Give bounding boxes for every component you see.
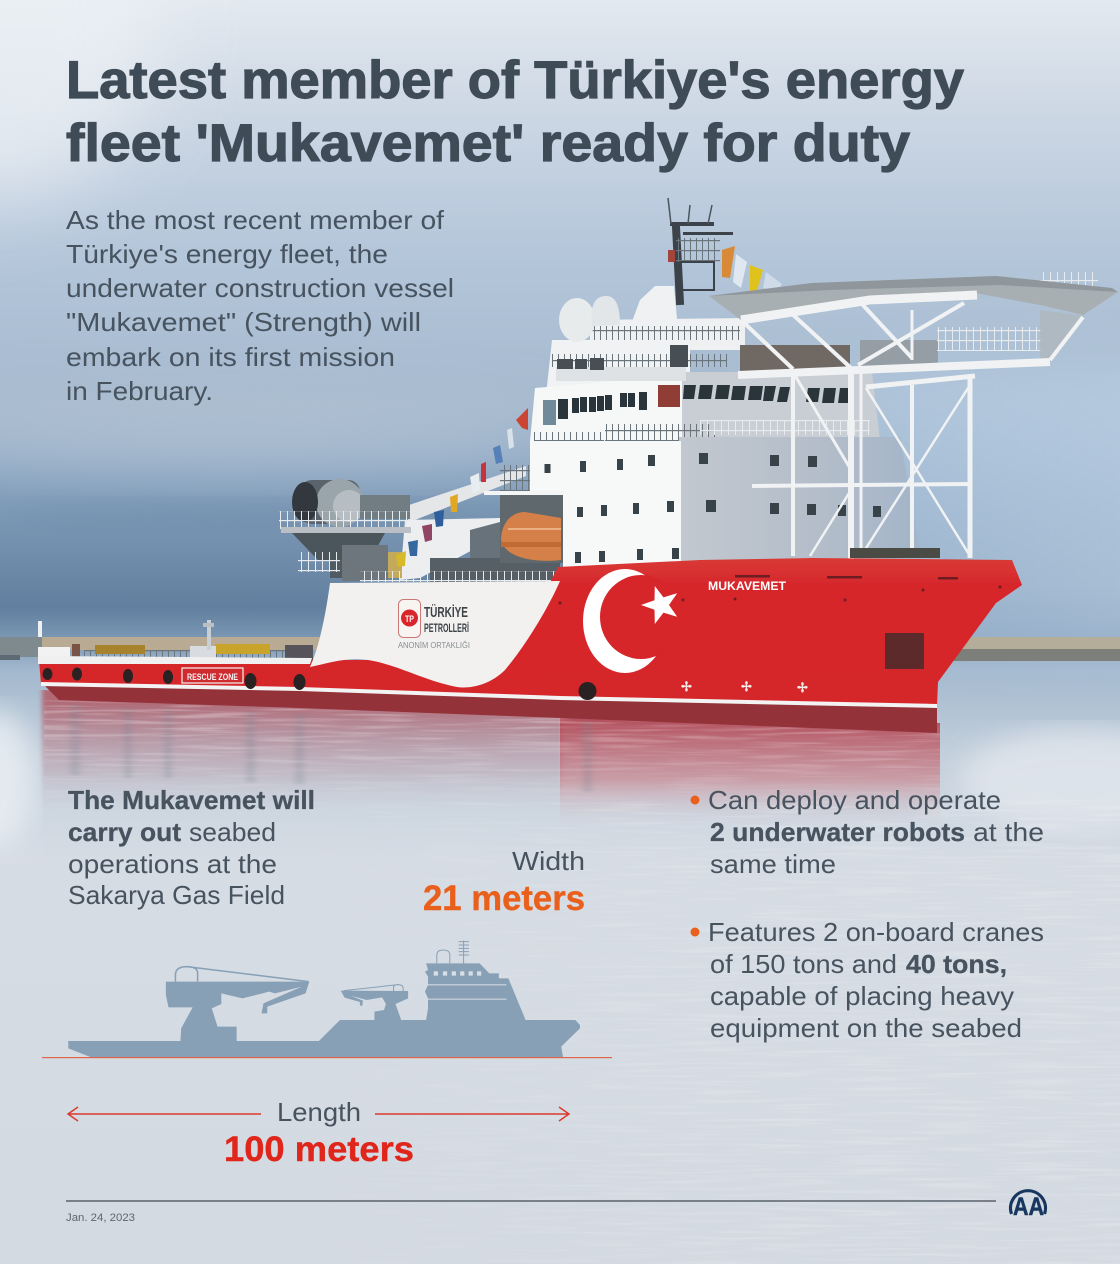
bow thruster marks bbox=[681, 679, 808, 695]
signal flags on the mast bbox=[722, 246, 782, 294]
text: Sakarya Gas Field operations bbox=[68, 785, 315, 910]
title: fleet 'Mukavemet' ready for duty bbox=[66, 114, 911, 173]
footer rule bbox=[66, 1200, 996, 1202]
bullet: on-board cranes bbox=[690, 917, 1044, 1043]
length label: Length bbox=[277, 1097, 361, 1127]
title: Latest member of Türkiye's energy bbox=[66, 51, 965, 110]
red bow hull bbox=[470, 558, 1022, 706]
TP logo and Türkiye Petrolleri lettering: TÜRKİYE bbox=[424, 604, 468, 621]
title bbox=[66, 51, 965, 173]
intro paragraph bbox=[66, 205, 454, 406]
bullet: on-board cranes: 40 tons, bbox=[906, 949, 1007, 979]
white waterline stripe bbox=[41, 682, 937, 708]
TP logo and Türkiye Petrolleri lettering bbox=[398, 600, 470, 650]
windows bbox=[544, 453, 881, 563]
text: Sakarya Gas Field operations: seabed bbox=[189, 817, 276, 847]
intro paragraph: As the most recent member of bbox=[66, 205, 445, 235]
fenders bbox=[42, 668, 596, 700]
rescue zone sign: RESCUE ZONE bbox=[187, 672, 238, 683]
breakwater on the horizon bbox=[0, 621, 1120, 661]
lower dark hull bbox=[41, 678, 937, 733]
text: Sakarya Gas Field operations: operations at the bbox=[68, 849, 277, 879]
icon: AA agency logo: AA bbox=[1013, 1193, 1044, 1221]
bow thruster marks: ✢ bbox=[797, 680, 808, 695]
TP logo and Türkiye Petrolleri lettering: ANONİM ORTAKLIĞI bbox=[398, 641, 470, 650]
length label bbox=[224, 1097, 414, 1169]
intro paragraph: underwater construction vessel bbox=[66, 273, 454, 303]
water ripples across the sea bbox=[0, 800, 1120, 1264]
date: Jan. 24, 2023 bbox=[66, 1212, 135, 1224]
width label: Width bbox=[512, 846, 585, 876]
aft deck equipment bbox=[38, 620, 313, 661]
bullet: on-board cranes: equipment on the seabed bbox=[710, 1013, 1022, 1043]
bullet: underwater robots bbox=[690, 785, 1044, 879]
width label bbox=[423, 846, 585, 918]
bullet: underwater robots: same time bbox=[710, 849, 836, 879]
ship photo bbox=[38, 198, 1118, 733]
ship side silhouette bbox=[42, 941, 612, 1058]
bullet: on-board cranes: Features 2 on-board cranes bbox=[708, 917, 1044, 947]
bullet: on-board cranes: capable of placing heavy bbox=[710, 981, 1014, 1011]
bridge windows bbox=[543, 385, 852, 425]
bow thruster marks: ✢ bbox=[681, 679, 692, 694]
bow hatch bbox=[885, 633, 924, 669]
bullet: underwater robots: 2 underwater robots bbox=[710, 817, 965, 847]
white side panel bbox=[310, 581, 560, 687]
intro paragraph: in February. bbox=[66, 376, 213, 406]
superstructure upper levels bbox=[530, 286, 880, 442]
domes and mast bbox=[559, 198, 733, 342]
length label: 100 meters bbox=[224, 1130, 414, 1169]
length arrows bbox=[68, 1107, 569, 1121]
aft red band bbox=[39, 660, 520, 697]
text: Sakarya Gas Field operations: carry out bbox=[68, 817, 181, 847]
reflection of the ship in the water bbox=[42, 690, 940, 830]
rescue zone sign bbox=[182, 668, 243, 683]
width label: 21 meters bbox=[423, 879, 585, 918]
ship name: MUKAVEMET bbox=[708, 579, 787, 593]
white deck edge bbox=[38, 656, 312, 664]
bullet: underwater robots: Can deploy and operate bbox=[708, 785, 1001, 815]
intro paragraph: "Mukavemet" (Strength) will bbox=[66, 307, 421, 337]
lifeboat bbox=[501, 512, 561, 561]
bow thruster marks: ✢ bbox=[741, 679, 752, 694]
superstructure main block bbox=[484, 437, 922, 572]
text: Sakarya Gas Field operations: The Mukavemet will bbox=[68, 785, 315, 815]
Turkish flag crescent and star bbox=[583, 569, 682, 673]
intro paragraph: embark on its first mission bbox=[66, 342, 395, 372]
TP logo and Türkiye Petrolleri lettering: TP bbox=[405, 614, 414, 624]
water ripples under the ship bbox=[44, 700, 940, 785]
hull fittings and portholes bbox=[558, 575, 1002, 604]
intro paragraph: Türkiye's energy fleet, the bbox=[66, 239, 388, 269]
text: Sakarya Gas Field operations: Sakarya Gas Field bbox=[68, 880, 285, 910]
TP logo and Türkiye Petrolleri lettering: PETROLLERİ bbox=[424, 622, 469, 635]
bullet: underwater robots: at the bbox=[973, 817, 1044, 847]
bullet: on-board cranes: of 150 tons and bbox=[710, 949, 897, 979]
rear crane machinery bbox=[279, 465, 560, 582]
flag string over the crane bbox=[396, 408, 528, 567]
helideck structure bbox=[709, 272, 1118, 560]
